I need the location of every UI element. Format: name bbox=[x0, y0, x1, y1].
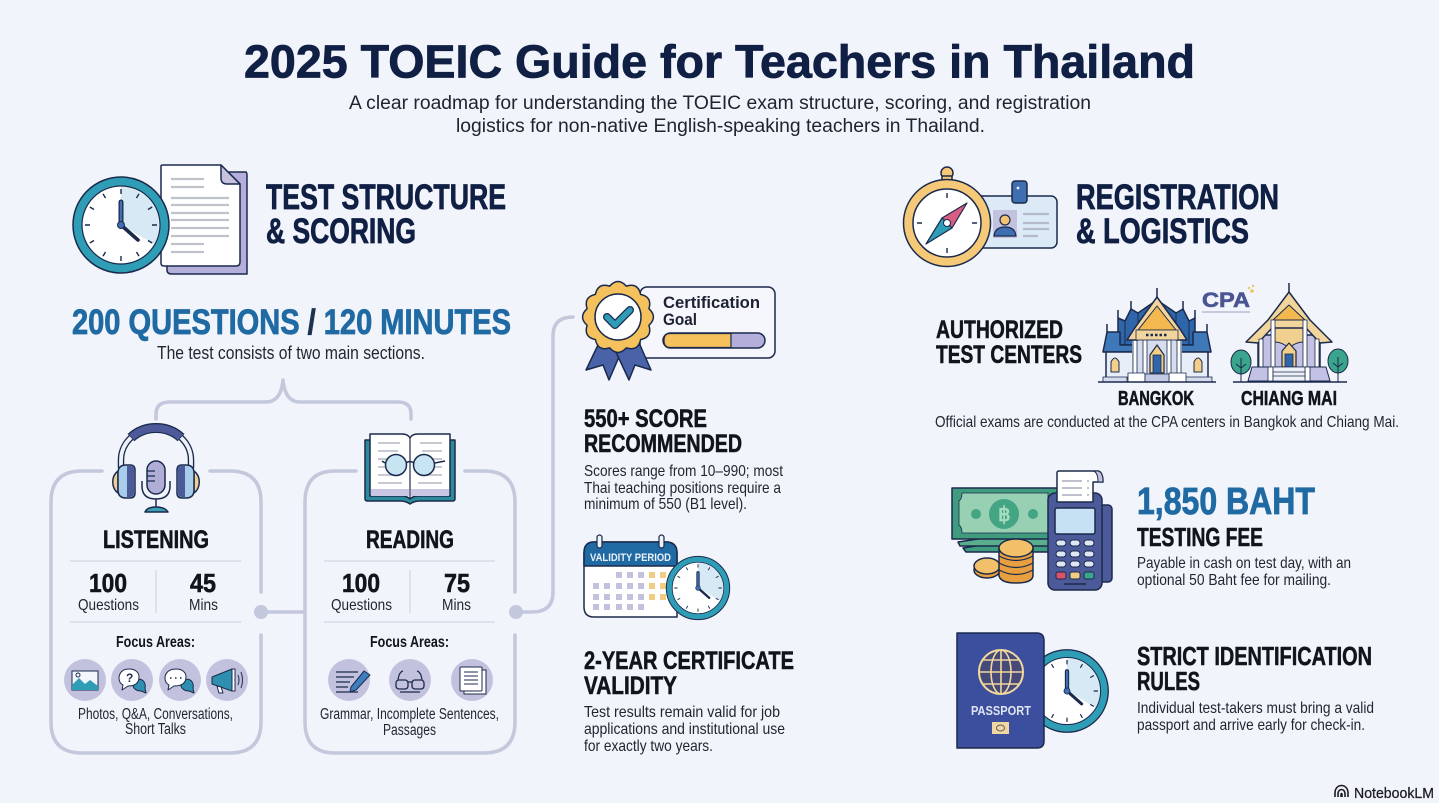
heading: strict identification rules: RULES bbox=[1137, 666, 1200, 696]
icon: passport and clock bbox=[957, 633, 1108, 748]
text: identification bbox=[1137, 700, 1374, 734]
stat: 100 questions bbox=[331, 568, 392, 614]
text: score range: minimum of 550 (B1 level). bbox=[584, 496, 747, 513]
stat: 1,850 baht: 1,850 BAHT bbox=[1137, 481, 1315, 523]
text: score range: Thai teaching positions require a bbox=[584, 480, 781, 497]
connector: reading to goals bbox=[509, 317, 573, 619]
text: score range bbox=[584, 463, 783, 513]
icon: grammar pencil bbox=[328, 659, 370, 701]
icon: headphones and microphone bbox=[113, 428, 199, 512]
heading: 2-year certificate validity: VALIDITY bbox=[584, 672, 677, 700]
bracket connector bbox=[156, 380, 411, 419]
icon: money and payment terminal: ฿ bbox=[998, 504, 1011, 526]
stat: 100 questions: Questions bbox=[331, 597, 392, 614]
reading title: READING bbox=[366, 526, 454, 554]
icon: passages bbox=[451, 659, 493, 701]
heading: 550+ score recommended: RECOMMENDED bbox=[584, 430, 742, 458]
icon: certification goal badge: Certification bbox=[663, 294, 760, 312]
heading: registration and logistics: & LOGISTICS bbox=[1076, 212, 1249, 251]
heading: authorized test centers: TEST CENTERS bbox=[936, 341, 1082, 369]
icon: open book with glasses bbox=[365, 434, 455, 504]
subtitle: logistics for non-native English-speaking teachers in Thailand. bbox=[456, 116, 985, 137]
subtitle bbox=[349, 93, 1091, 137]
heading: authorized test centers: AUTHORIZED bbox=[936, 316, 1063, 344]
panel: certification goal bbox=[583, 282, 794, 755]
icon: calendar and clock bbox=[584, 535, 730, 620]
listening focus text bbox=[78, 706, 233, 738]
listening focus text: Photos, Q&A, Conversations, bbox=[78, 706, 233, 723]
stat: 100 questions: 100 bbox=[89, 568, 127, 598]
focus areas label: Focus Areas: bbox=[116, 634, 195, 651]
icon: Bangkok temple bbox=[1098, 288, 1216, 382]
reading focus text bbox=[320, 706, 499, 739]
stat: 45 mins: 45 bbox=[190, 568, 216, 598]
icon: question bubbles: ? bbox=[126, 671, 133, 685]
heading: registration and logistics bbox=[1076, 178, 1279, 251]
listening card outline bbox=[51, 471, 261, 753]
heading: testing fee: TESTING FEE bbox=[1137, 522, 1263, 552]
icon: megaphone bbox=[206, 659, 248, 701]
heading: 2-year certificate validity: 2-YEAR CERTIFICATE bbox=[584, 647, 794, 675]
heading: strict identification rules: STRICT IDENTIFICATION bbox=[1137, 641, 1372, 671]
panel: listening bbox=[51, 428, 261, 753]
watermark: NotebookLM: NotebookLM bbox=[1354, 786, 1434, 802]
stat: 45 mins: Mins bbox=[189, 597, 218, 614]
icon: passport and clock: PASSPORT bbox=[971, 704, 1031, 718]
text: validity bbox=[584, 704, 785, 755]
reading card outline bbox=[305, 471, 515, 753]
subtitle: A clear roadmap for understanding the TOEIC exam structure, scoring, and registration bbox=[349, 93, 1091, 114]
title: 2025 TOEIC Guide for Teachers in Thailand bbox=[244, 36, 1195, 88]
text: payment: optional 50 Baht fee for mailing. bbox=[1137, 572, 1331, 589]
heading: 2-year certificate validity bbox=[584, 647, 794, 700]
heading: authorized test centers bbox=[936, 316, 1082, 369]
heading: test structure and scoring: & SCORING bbox=[266, 212, 416, 251]
text: validity: for exactly two years. bbox=[584, 738, 713, 755]
reading focus text: Grammar, Incomplete Sentences, bbox=[320, 706, 499, 723]
focus areas label: Focus Areas: bbox=[370, 634, 449, 651]
label: Chiang Mai: CHIANG MAI bbox=[1241, 387, 1337, 410]
heading: strict identification rules bbox=[1137, 641, 1372, 696]
icon: certification goal badge bbox=[583, 282, 775, 380]
caption: two sections: The test consists of two main sections. bbox=[157, 343, 425, 363]
panel: reading bbox=[305, 434, 515, 753]
icon: clock and document bbox=[73, 165, 247, 274]
heading: registration and logistics: REGISTRATION bbox=[1076, 178, 1279, 217]
logo: CPA: CPA bbox=[1202, 289, 1250, 312]
text: payment bbox=[1137, 555, 1351, 589]
heading: 550+ score recommended: 550+ SCORE bbox=[584, 405, 707, 433]
stat: 200 questions / 120 minutes: 200 QUESTIONS / 120 MINUTES bbox=[72, 303, 511, 342]
icon: money and payment terminal bbox=[952, 471, 1112, 590]
icon: Chiang Mai temple bbox=[1231, 283, 1348, 382]
icon: compass and ID card bbox=[904, 167, 1057, 266]
icon: glasses bbox=[389, 659, 431, 701]
reading focus text: Passages bbox=[383, 722, 436, 739]
stat: 75 mins: 75 bbox=[444, 568, 470, 598]
label: Bangkok: BANGKOK bbox=[1118, 387, 1194, 410]
text: payment: Payable in cash on test day, with an bbox=[1137, 555, 1351, 572]
listening title: LISTENING bbox=[103, 526, 209, 554]
heading: test structure and scoring: TEST STRUCTURE bbox=[266, 178, 506, 217]
icon: question bubbles bbox=[111, 659, 153, 701]
icon: conversation bubbles bbox=[159, 659, 201, 701]
heading: test structure and scoring bbox=[266, 178, 506, 251]
stat: 100 questions bbox=[78, 568, 139, 614]
text: validity: applications and institutional use bbox=[584, 721, 785, 738]
listening focus text: Short Talks bbox=[125, 721, 186, 738]
stat: 75 mins: Mins bbox=[442, 597, 471, 614]
text: identification: passport and arrive early for check-in. bbox=[1137, 717, 1365, 734]
heading: 550+ score recommended bbox=[584, 405, 742, 458]
panel: registration and logistics bbox=[904, 167, 1399, 748]
icon: calendar and clock: VALIDITY PERIOD bbox=[590, 552, 671, 564]
stat: 45 mins bbox=[189, 568, 218, 614]
connector: listening to reading bbox=[254, 605, 304, 619]
logo: CPA bbox=[1202, 285, 1254, 312]
icon: certification goal badge: Goal bbox=[663, 311, 697, 329]
text: score range: Scores range from 10–990; most bbox=[584, 463, 783, 480]
text: identification: Individual test-takers must bring a valid bbox=[1137, 700, 1374, 717]
text: validity: Test results remain valid for job bbox=[584, 704, 780, 721]
icon: photo bbox=[64, 659, 106, 701]
stat: 100 questions: 100 bbox=[342, 568, 380, 598]
stat: 75 mins bbox=[442, 568, 471, 614]
stat: 100 questions: Questions bbox=[78, 597, 139, 614]
panel: test structure and scoring bbox=[51, 165, 794, 755]
